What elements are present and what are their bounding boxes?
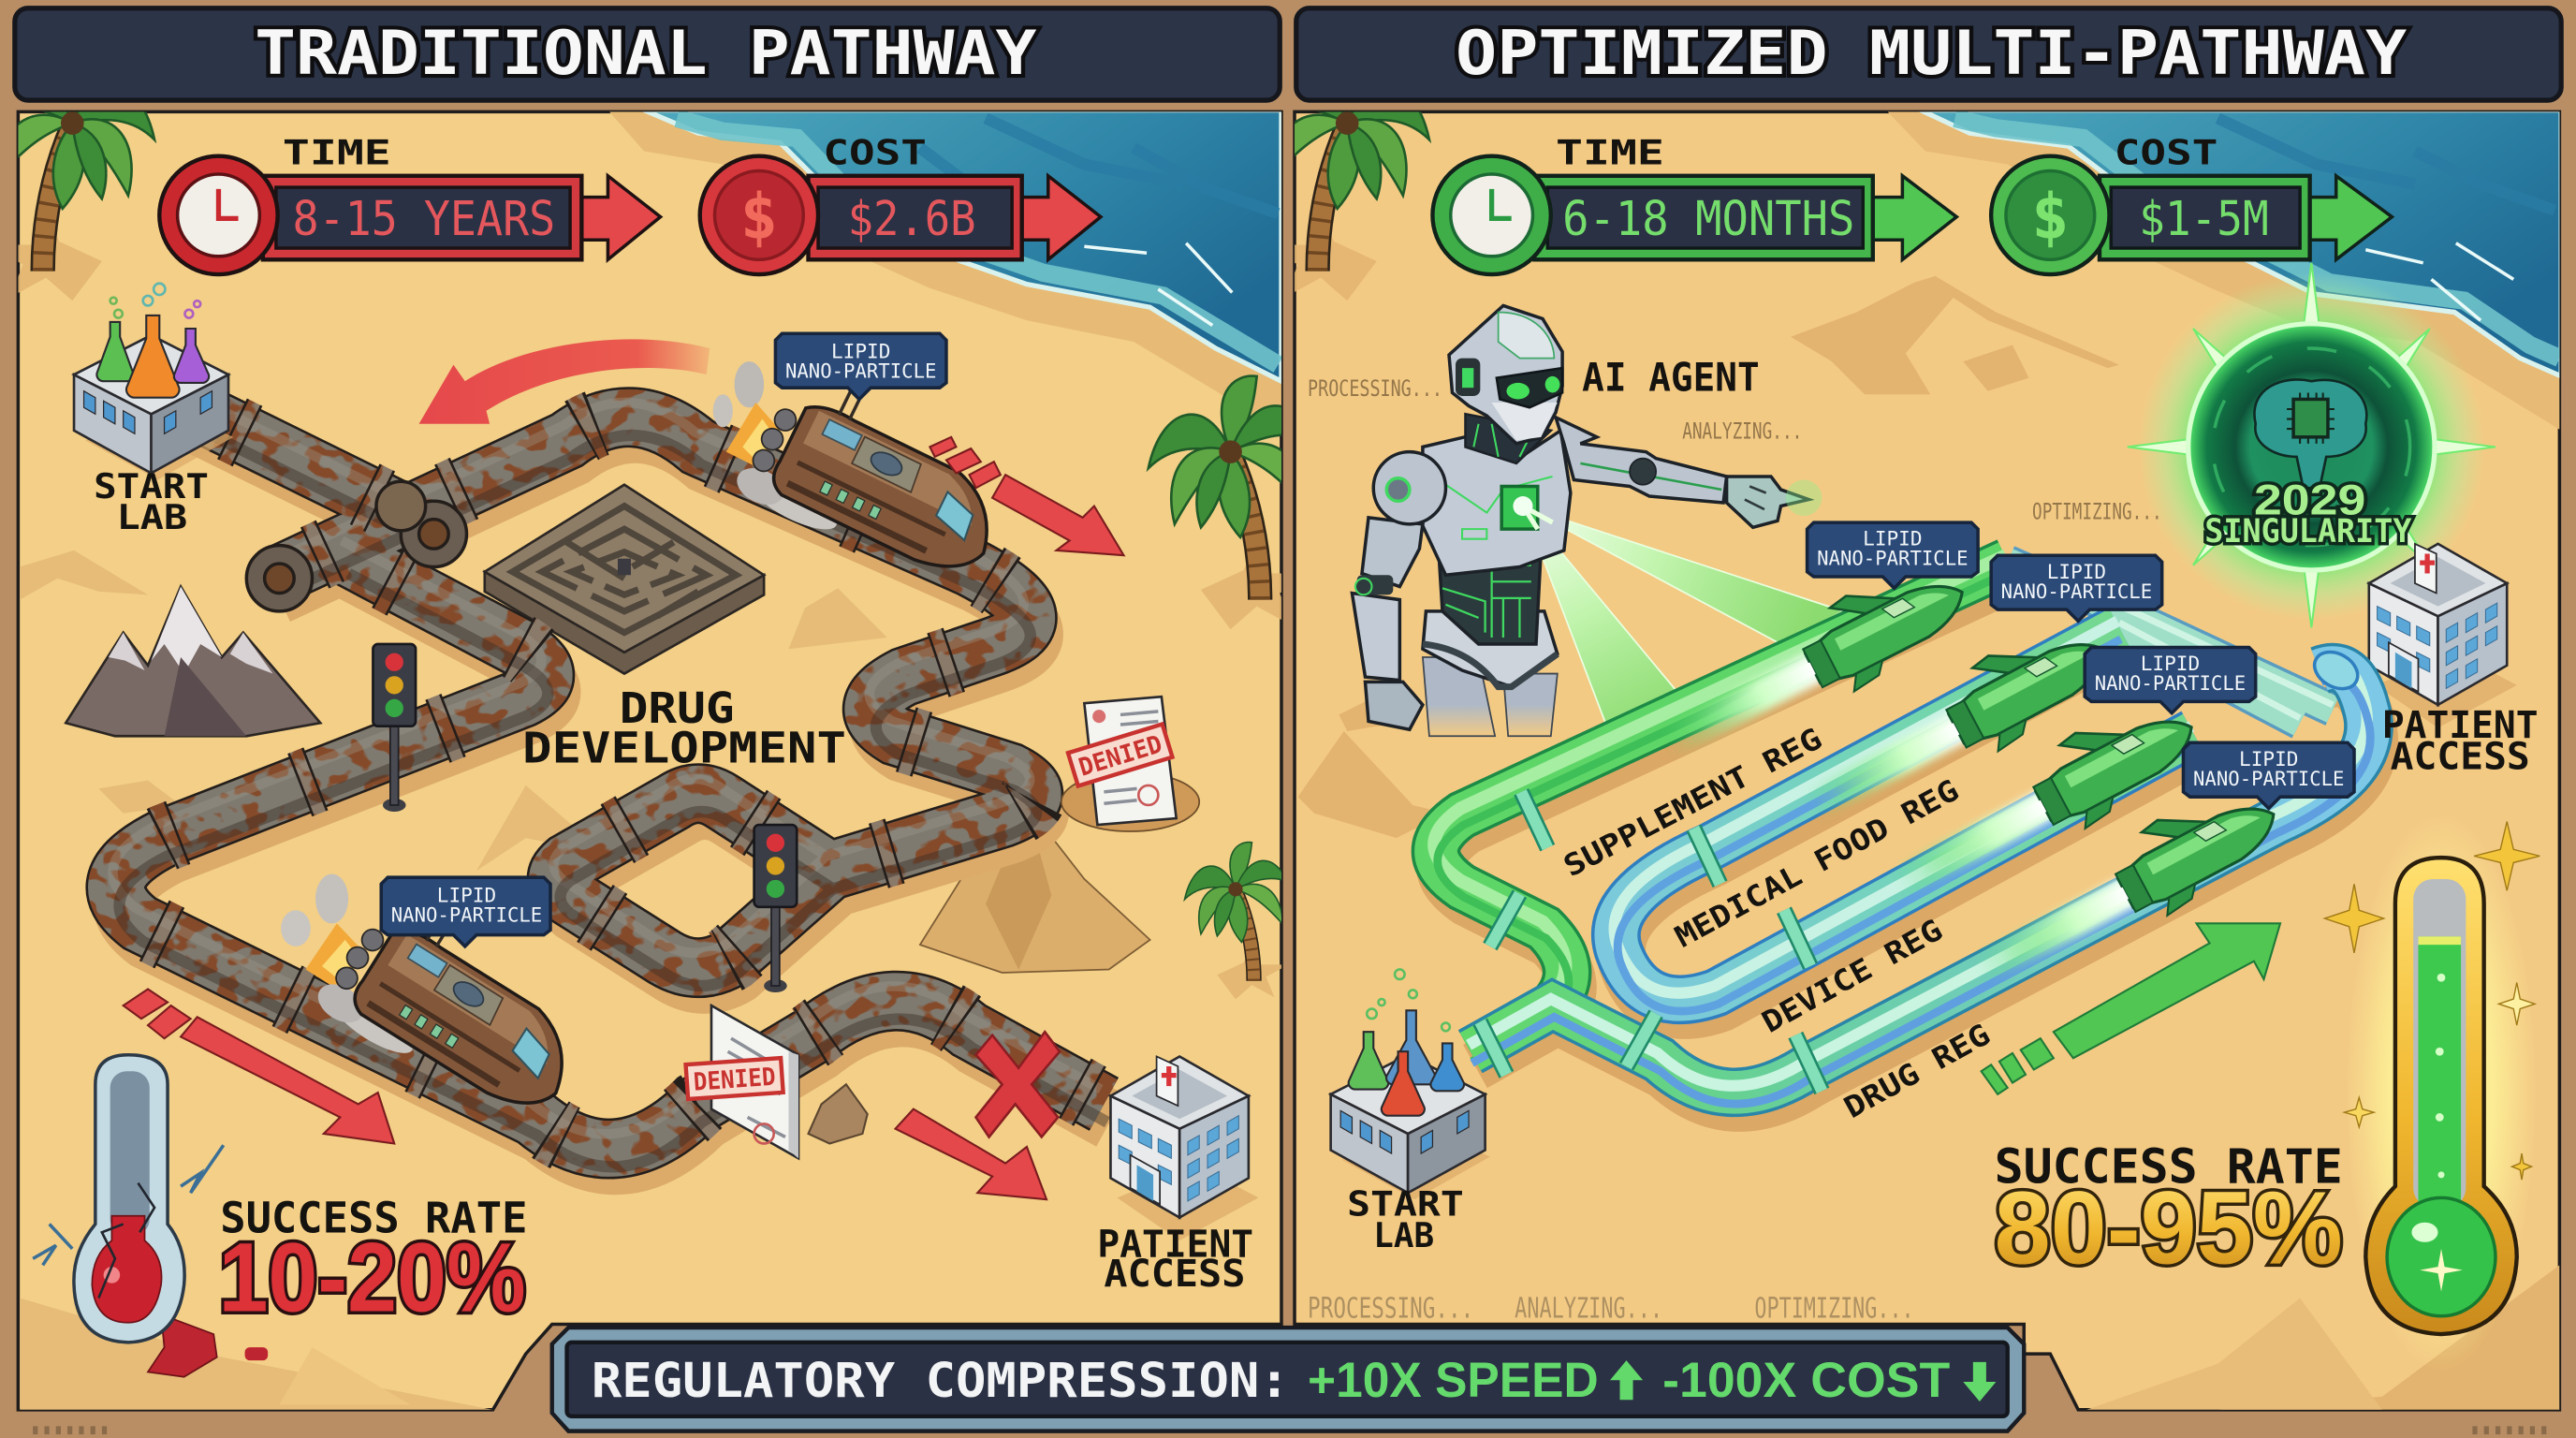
metric: optimized time: 6-18 MONTHS	[1562, 192, 1854, 247]
upper connectors	[2008, 557, 2333, 723]
status: analyzing: ANALYZING...	[1682, 418, 1802, 445]
header: optimized: OPTIMIZED MULTI-PATHWAY	[1456, 19, 2407, 89]
clock icon	[159, 156, 278, 274]
success rate: optimized: 80-95%	[1995, 1171, 2343, 1286]
callout: medical food: LIPID	[2047, 560, 2106, 583]
status: processing: PROCESSING...	[1308, 375, 1442, 402]
optimized pipes	[1434, 555, 2374, 1108]
bar	[263, 176, 581, 259]
label: start lab (optimized)	[1347, 1184, 1464, 1255]
red x	[976, 1032, 1060, 1137]
label: patient access (optimized): ACCESS	[2391, 734, 2530, 778]
loop flange	[2308, 645, 2364, 697]
tube	[2413, 879, 2466, 1208]
label: drug development: DRUG	[620, 683, 735, 733]
clock icon	[1432, 156, 1551, 274]
smoke and fire	[735, 361, 764, 407]
brain chip	[2254, 379, 2366, 488]
abdomen	[1439, 550, 1541, 644]
pipe shadow	[1441, 577, 2374, 1108]
panel: optimized multi-pathway	[1295, 110, 2561, 1410]
label: start lab (traditional): LAB	[117, 497, 187, 537]
arrow head	[1869, 176, 1956, 259]
thermometer: traditional	[33, 1055, 268, 1377]
metric: traditional time	[159, 133, 661, 274]
callout: lipid nano-particle top: LIPID	[831, 340, 890, 363]
status: optimizing: OPTIMIZING...	[2032, 499, 2162, 525]
2029 text: 2029	[2254, 476, 2365, 523]
torso	[1423, 431, 1571, 575]
bar	[1534, 176, 1873, 259]
supplement pipe	[1434, 555, 2009, 1062]
callout: drug: LIPID	[2239, 747, 2298, 770]
shoulder	[1373, 452, 1445, 524]
lab: traditional	[74, 284, 233, 479]
status row bottom: OPTIMIZING...	[1754, 1293, 1914, 1326]
bar	[2100, 176, 2310, 259]
callout: device: NANO-PARTICLE	[2095, 671, 2246, 695]
metric: optimized cost: $1-5M	[2139, 192, 2269, 247]
beams	[1523, 506, 1843, 726]
metric: traditional cost: $	[740, 180, 778, 253]
status row bottom: ANALYZING...	[1515, 1293, 1662, 1326]
label: drug reg: DRUG REG	[1838, 1018, 1996, 1125]
coin icon	[1991, 156, 2110, 274]
glow	[2346, 814, 2537, 1372]
pipe collars	[1480, 792, 1822, 1091]
callout: medical food	[1991, 555, 2162, 621]
callout: supplement: NANO-PARTICLE	[1817, 547, 1969, 570]
corner dots	[33, 1426, 2546, 1434]
banner: regulatory compression	[552, 1328, 2024, 1431]
label: supplement reg: SUPPLEMENT REG	[1559, 722, 1827, 884]
label: start lab (optimized): START	[1347, 1184, 1464, 1225]
time label: TIME	[283, 133, 391, 173]
callout: supplement	[1808, 522, 1978, 588]
arrow: green dashed	[1982, 923, 2280, 1094]
denied stamp: DENIED	[1076, 730, 1165, 783]
red mercury	[92, 1216, 162, 1323]
denied document: lower	[686, 1005, 798, 1158]
palm: traditional lower right	[1185, 843, 1289, 999]
hospital: optimized	[2369, 544, 2517, 727]
label: start lab (optimized): LAB	[1373, 1215, 1434, 1255]
head	[1449, 305, 1562, 444]
hospital: traditional	[1110, 1056, 1258, 1240]
bulb	[2387, 1197, 2496, 1316]
train: upper	[713, 353, 1027, 602]
palm: left panel corner	[18, 111, 157, 301]
callout: lipid nano-particle top: NANO-PARTICLE	[785, 360, 936, 383]
arrow: curved red	[419, 339, 710, 424]
status row bottom	[1308, 1293, 1914, 1326]
label: start lab (traditional)	[94, 466, 209, 537]
chest core	[1501, 486, 1538, 529]
label: medical food reg: MEDICAL FOOD REG	[1670, 773, 1965, 955]
cost label: COST	[823, 133, 927, 173]
metric: traditional time: 8-15 YEARS	[292, 192, 555, 247]
metric: optimized cost: $	[2031, 180, 2069, 253]
label: patient access (traditional): PATIENT	[1097, 1223, 1253, 1267]
legs	[1423, 657, 1558, 736]
status row bottom: PROCESSING...	[1308, 1293, 1473, 1326]
arrow head	[1018, 176, 1101, 259]
arrow: dashed red upper right	[929, 437, 1123, 555]
arrow head	[2305, 176, 2392, 259]
callout: supplement: LIPID	[1863, 527, 1923, 550]
label: drug development	[522, 683, 846, 772]
hips	[1423, 611, 1558, 687]
left arm	[1362, 518, 1423, 587]
header: traditional	[15, 8, 1280, 100]
label: device reg: DEVICE REG	[1757, 914, 1948, 1040]
traffic light: upper	[373, 644, 416, 812]
panel: traditional pathway	[18, 110, 1281, 1410]
icon: arrow down	[1963, 1362, 1996, 1401]
banner: regulatory compression: +10X SPEED	[1308, 1353, 1599, 1408]
sea	[1921, 110, 2561, 376]
banner: regulatory compression: -100X COST	[1662, 1353, 1950, 1408]
medical food and device pipe	[1615, 621, 2195, 1011]
palm: right panel corner	[1295, 111, 1432, 301]
gold shell	[2365, 858, 2517, 1334]
denied document: upper	[1061, 697, 1199, 831]
rust pipeline	[112, 392, 1110, 1167]
metric: optimized cost	[1991, 133, 2392, 274]
arrow: red lower right	[896, 1109, 1046, 1199]
arrow head	[578, 176, 661, 259]
missile: device	[1875, 683, 2210, 917]
sea	[644, 110, 1281, 381]
core ring	[2188, 324, 2435, 570]
thermometer: optimized	[2346, 814, 2537, 1372]
rubble	[809, 1084, 868, 1143]
metric: traditional cost	[700, 133, 1101, 274]
robot ai agent	[1352, 305, 1822, 736]
coin icon	[700, 156, 818, 274]
arrow: dashed red lower left	[124, 990, 394, 1143]
cracks sparks	[33, 1145, 224, 1265]
callout: lipid nano-particle lower	[381, 877, 550, 946]
denied stamp: DENIED	[693, 1064, 777, 1097]
header: optimized	[1296, 8, 2561, 100]
train: lower	[281, 874, 608, 1139]
missile: drug	[1957, 770, 2292, 1005]
icon: arrow up	[1610, 1360, 1643, 1400]
drug pipe	[1469, 661, 2370, 1104]
header: traditional: TRADITIONAL PATHWAY	[255, 19, 1036, 89]
callout: drug: NANO-PARTICLE	[2193, 767, 2344, 790]
singularity	[2128, 263, 2496, 627]
halo	[2137, 272, 2485, 621]
missile: medical food	[1788, 607, 2123, 841]
success rate: traditional: SUCCESS RATE	[220, 1193, 527, 1242]
valve flanges	[246, 481, 466, 611]
time label: TIME	[1556, 133, 1664, 173]
spikes	[2128, 263, 2496, 627]
callout: drug	[2183, 742, 2354, 808]
pointing arm	[1556, 418, 1727, 503]
label: patient access (optimized)	[2382, 703, 2539, 778]
label: ai agent: AI AGENT	[1582, 355, 1760, 401]
callout: medical food: NANO-PARTICLE	[2001, 580, 2152, 603]
callout: lipid nano-particle top	[775, 333, 946, 399]
banner: regulatory compression: REGULATORY COMPRESSION:	[592, 1354, 1290, 1409]
sand mound	[920, 805, 1150, 973]
hand	[1727, 477, 1808, 527]
beach: wet sand	[1886, 110, 2561, 431]
dunes	[1298, 276, 2559, 1410]
sparkles	[2324, 822, 2539, 1180]
callout: lipid nano-particle lower: NANO-PARTICLE	[391, 903, 542, 927]
label: patient access (optimized): PATIENT	[2382, 703, 2539, 747]
beach: wet sand	[607, 110, 1281, 431]
callout: device	[2085, 647, 2256, 713]
flasks	[1349, 1032, 1388, 1090]
blood puddle	[148, 1314, 217, 1377]
metric: optimized time	[1432, 133, 1956, 274]
palm: traditional right side	[1146, 374, 1281, 629]
label: start lab (traditional): START	[94, 466, 209, 506]
label: patient access (traditional)	[1097, 1223, 1253, 1296]
singularity text: SINGULARITY	[2204, 512, 2411, 550]
success rate: traditional: 10-20%	[218, 1224, 526, 1333]
callout: lipid nano-particle lower: LIPID	[437, 884, 496, 907]
label: patient access (traditional): ACCESS	[1104, 1252, 1245, 1296]
traffic light: lower	[754, 825, 797, 992]
glass tube	[74, 1055, 184, 1343]
metric: traditional cost: $2.6B	[848, 192, 976, 247]
lab: optimized	[1331, 969, 1490, 1199]
missile: supplement	[1644, 549, 1980, 778]
maze	[485, 485, 764, 674]
mountain	[66, 587, 320, 736]
cost label: COST	[2115, 133, 2217, 173]
flasks	[96, 322, 133, 381]
neck	[1466, 414, 1551, 463]
dunes	[20, 550, 887, 1410]
success rate: optimized: SUCCESS RATE	[1995, 1140, 2343, 1196]
smoke and fire	[315, 874, 348, 923]
callout: device: LIPID	[2141, 652, 2200, 675]
bar	[809, 176, 1022, 259]
label: drug development: DEVELOPMENT	[522, 723, 846, 772]
